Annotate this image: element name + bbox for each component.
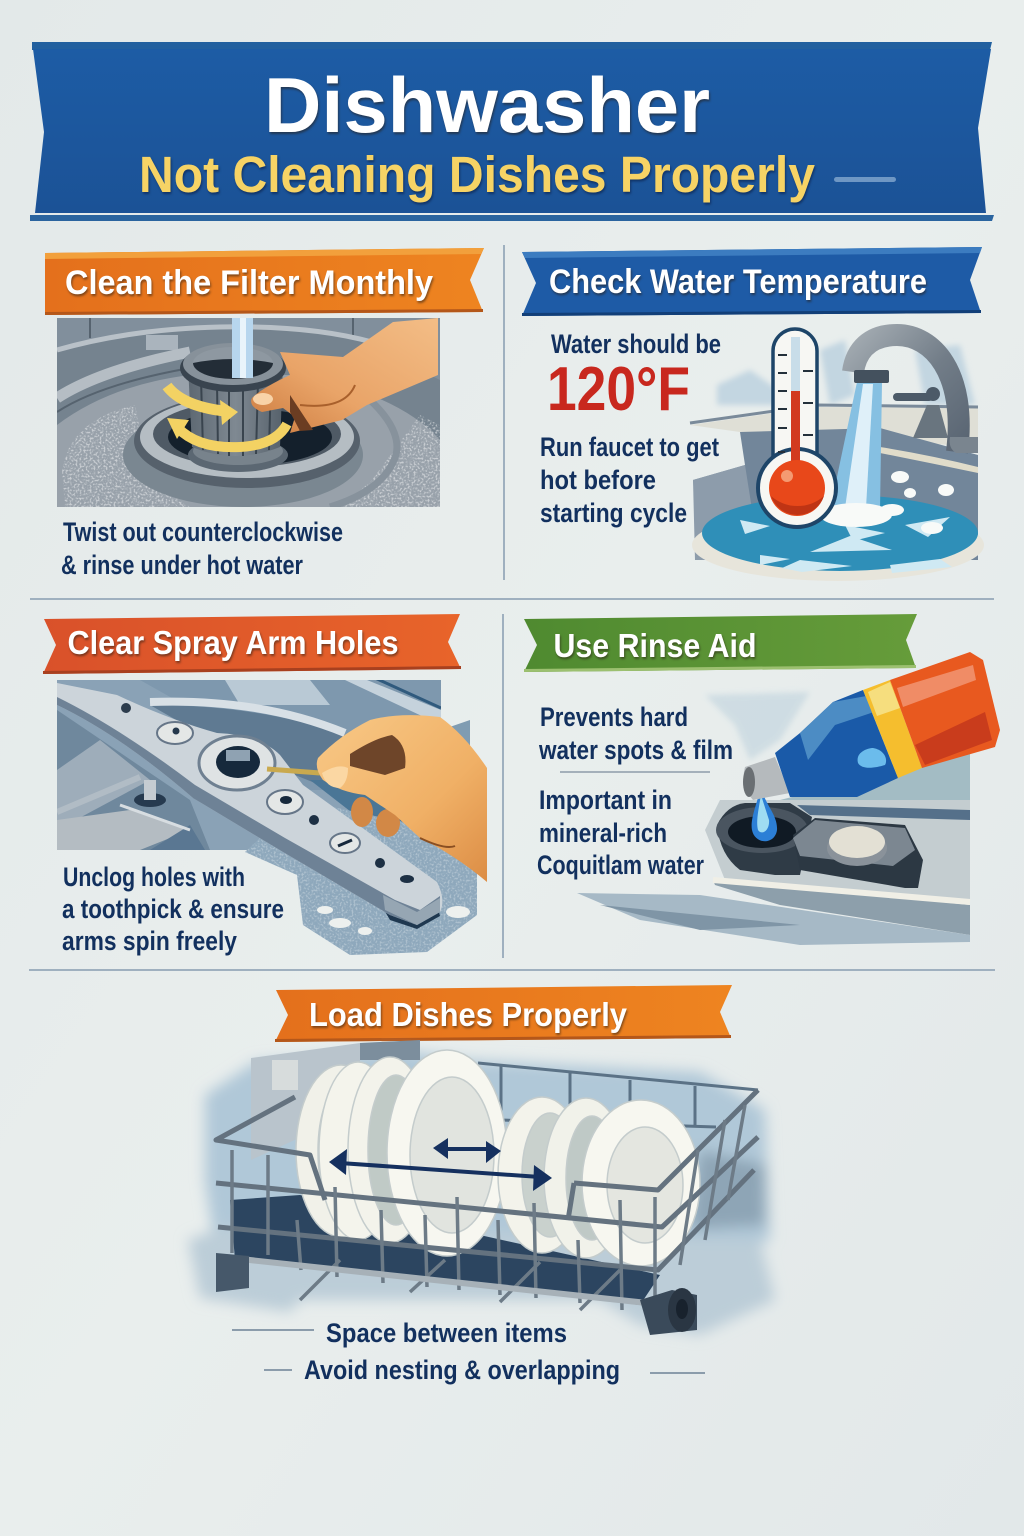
panel: use rinse aid — [524, 614, 1000, 945]
caption: spray arm: Unclog holes with — [63, 862, 245, 892]
rinse aid bottle — [743, 652, 1000, 800]
water splatter — [245, 800, 480, 960]
illustration: dish rack with plates — [188, 1040, 775, 1335]
temperature text: starting cycle — [540, 498, 687, 528]
caption: load dishes — [232, 1318, 705, 1385]
panel: load dishes properly — [188, 985, 775, 1385]
icon: hand holding toothpick — [317, 715, 487, 882]
caption: load dishes: Space between items — [326, 1318, 567, 1348]
caption: filter — [61, 517, 343, 580]
heading: spray arm: Clear Spray Arm Holes — [68, 624, 398, 661]
caption: filter: & rinse under hot water — [61, 550, 303, 580]
caption: spray arm — [62, 862, 284, 956]
caption: spray arm: arms spin freely — [62, 926, 237, 956]
heading: water temperature — [522, 247, 982, 316]
caption: rinse aid: mineral-rich — [539, 818, 667, 848]
illustration: sink with running faucet — [690, 329, 984, 581]
title: Dishwasher — [264, 61, 710, 149]
caption: load dishes: Avoid nesting & overlapping — [304, 1355, 620, 1385]
caption: rinse aid — [537, 702, 733, 880]
temperature text: 120°F — [547, 355, 690, 424]
temperature text: Water should be — [551, 329, 721, 359]
title banner — [30, 42, 994, 221]
heading: load dishes — [275, 985, 732, 1042]
panel: check water temperature — [522, 247, 984, 581]
rack wheels — [216, 1253, 697, 1335]
caption: rinse aid: Coquitlam water — [537, 850, 704, 880]
heading: rinse aid: Use Rinse Aid — [554, 627, 756, 664]
heading: spray arm — [43, 614, 461, 674]
caption: rinse aid: Important in — [539, 785, 672, 815]
icon: twist arrows — [167, 386, 287, 447]
heading: load dishes: Load Dishes Properly — [309, 996, 628, 1033]
heading: water temperature: Check Water Temperature — [549, 263, 927, 301]
heading: rinse aid — [524, 614, 917, 672]
back rack wires — [478, 1063, 758, 1127]
wire rack — [216, 1090, 758, 1310]
icon: hand — [251, 318, 438, 433]
subtitle: Not Cleaning Dishes Properly — [139, 146, 816, 203]
heading: clean the filter: Clean the Filter Monthly — [65, 264, 433, 302]
illustration: filter being twisted out — [57, 312, 440, 507]
temperature text: Run faucet to get — [540, 432, 719, 462]
temperature text: hot before — [540, 465, 656, 495]
caption: rinse aid: Prevents hard — [540, 702, 688, 732]
panel: clear spray arm holes — [43, 614, 487, 960]
heading: clean the filter — [45, 248, 484, 315]
temperature text — [540, 329, 721, 528]
thermometer — [758, 329, 836, 527]
illustration: spray arm and toothpick — [57, 678, 487, 960]
caption: spray arm: a toothpick & ensure — [62, 894, 284, 924]
illustration: rinse aid bottle and dispenser — [577, 652, 1000, 945]
caption: rinse aid: water spots & film — [538, 735, 733, 765]
caption: filter: Twist out counterclockwise — [63, 517, 343, 547]
arrows: spacing — [329, 1138, 552, 1191]
panel: clean the filter — [45, 248, 484, 580]
